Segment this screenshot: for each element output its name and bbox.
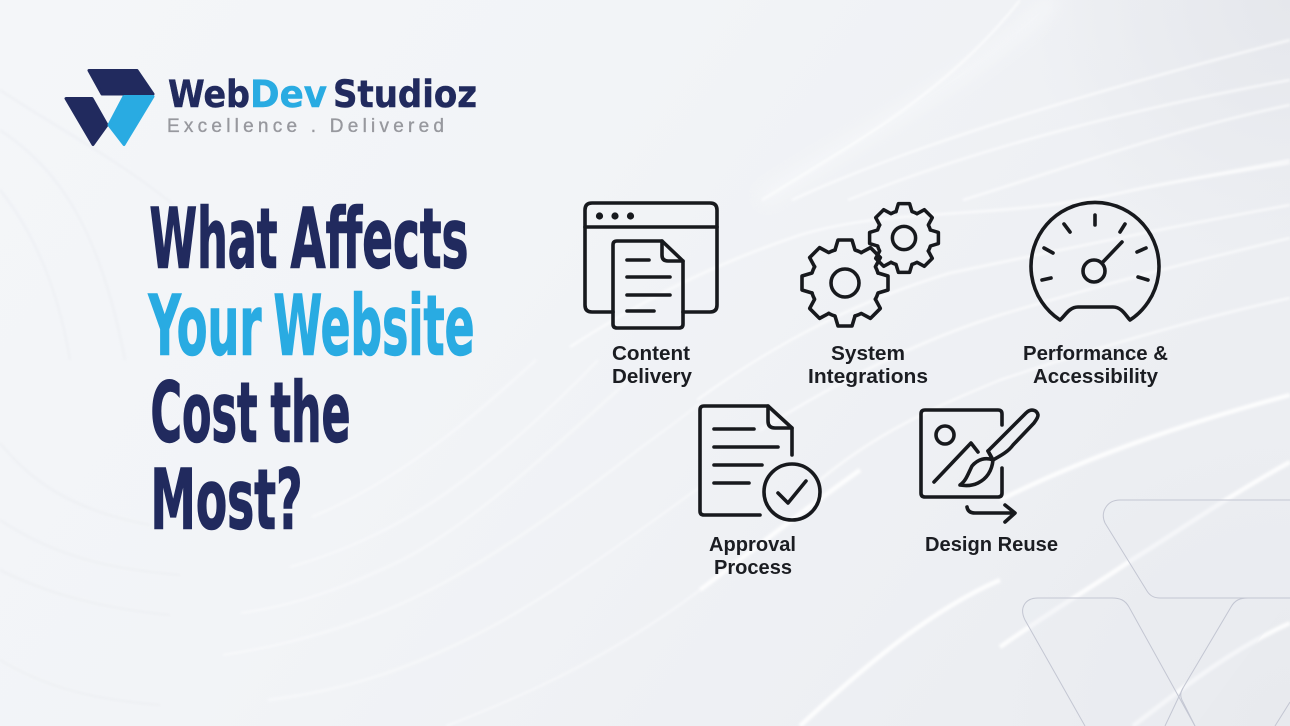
label: System Integrations: System bbox=[831, 343, 905, 365]
icon: speedometer gauge bbox=[1031, 202, 1159, 320]
title line: What Affects: What bbox=[150, 190, 278, 288]
item: Content Delivery bbox=[585, 203, 717, 388]
background outline shapes bottom right bbox=[1023, 500, 1290, 726]
label: Approval Process: Process bbox=[714, 557, 792, 579]
logo bbox=[66, 70, 477, 144]
item: Design Reuse bbox=[921, 410, 1058, 556]
logo wordmark: Studioz bbox=[333, 73, 477, 116]
title line: Cost the: Cost bbox=[150, 364, 258, 462]
label: Content Delivery: Delivery bbox=[612, 366, 693, 388]
icon: image with paintbrush and arrow bbox=[921, 410, 1038, 522]
title line: Cost the: the bbox=[270, 364, 350, 462]
icon: document with check mark bbox=[700, 406, 820, 520]
icon: two gears bbox=[802, 204, 938, 326]
title line: Your Website: Website bbox=[274, 278, 474, 374]
logo mark bbox=[66, 70, 153, 144]
label: Performance & Accessibility: Accessibility bbox=[1033, 366, 1159, 388]
label: Approval Process: Approval bbox=[709, 534, 796, 556]
label: Content Delivery bbox=[612, 343, 693, 388]
icon: browser window with document bbox=[585, 203, 717, 328]
logo wordmark: Web bbox=[168, 73, 250, 116]
label: System Integrations: Integrations bbox=[808, 366, 928, 388]
logo wordmark: Dev bbox=[250, 73, 327, 116]
item: Performance & Accessibility bbox=[1023, 202, 1168, 388]
label: System Integrations bbox=[808, 343, 928, 388]
item: Approval Process bbox=[700, 406, 820, 579]
label: Design Reuse: Design Reuse bbox=[925, 534, 1058, 556]
title line: What Affects: Affects bbox=[290, 190, 468, 288]
title line: Your Website: Your bbox=[148, 278, 262, 374]
title bbox=[148, 190, 474, 548]
label: Performance & Accessibility: Performance & bbox=[1023, 343, 1168, 365]
label: Performance & Accessibility bbox=[1023, 343, 1168, 388]
label: Content Delivery: Content bbox=[612, 343, 690, 365]
title line: Your Website bbox=[148, 278, 474, 374]
logo tagline: Excellence . Delivered bbox=[167, 116, 444, 137]
title line: Most?: Most? bbox=[150, 452, 302, 548]
item: System Integrations bbox=[802, 204, 938, 388]
label: Approval Process bbox=[709, 534, 796, 579]
